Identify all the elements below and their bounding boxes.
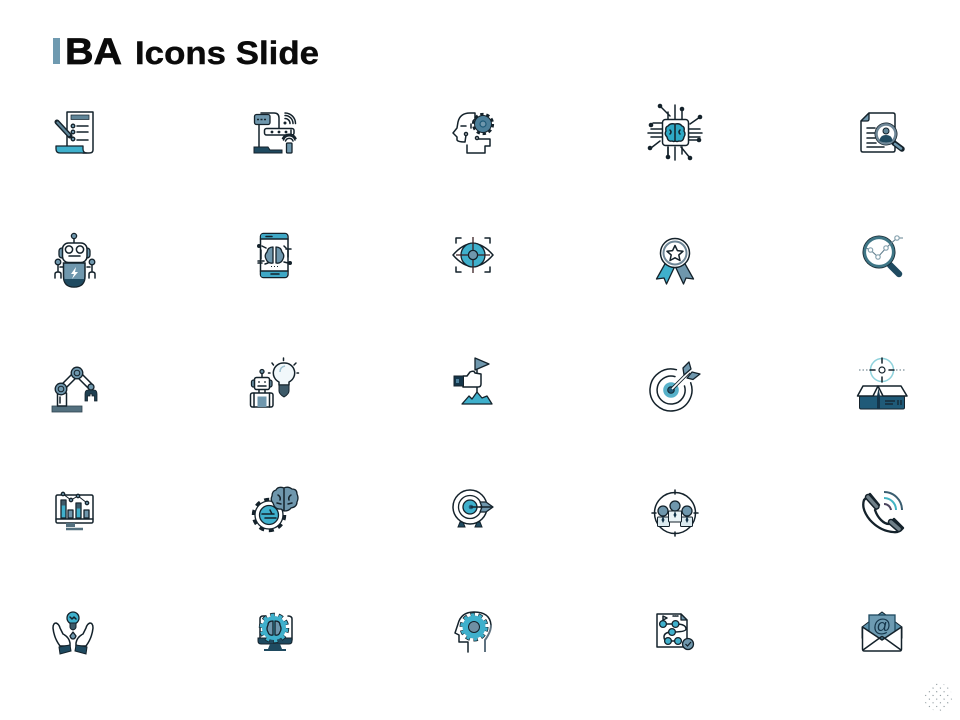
icon: head with gear inside (455, 612, 491, 652)
icon: gear and brain (254, 487, 298, 530)
title (53, 31, 319, 72)
icon: robotic arm (52, 367, 97, 412)
icon: target with arrow (650, 362, 700, 411)
icon: robot (55, 233, 95, 287)
icon: workflow document with check (657, 614, 694, 650)
icon: brain chip (648, 104, 702, 160)
icon: eye with focus target (453, 237, 493, 273)
icon: envelope with at sign (862, 612, 902, 651)
icon: head with gear (453, 113, 492, 153)
icon: box with crosshair (858, 358, 907, 409)
icon: robot and light bulb (250, 358, 298, 407)
icon: team in crosshair (652, 490, 698, 536)
icon: telephone with signal (863, 492, 903, 532)
icon: magnifier with graph (862, 236, 903, 274)
icon: document with magnifier (861, 113, 902, 152)
icon: hands with light bulb (53, 612, 93, 654)
title: BA (65, 31, 122, 72)
icon: monitor with bar chart (56, 492, 93, 529)
icon: award ribbon (656, 238, 694, 284)
title: Icons Slide (135, 35, 319, 71)
icon: envelope with at sign: @ (873, 616, 891, 636)
icon: router and wifi (254, 113, 296, 153)
icon: phone with brain (257, 234, 292, 278)
icon: hand holding flag on mountain (454, 358, 492, 404)
decorative dot circle (924, 683, 952, 711)
icon: monitor with brain gear (258, 615, 292, 651)
icon: document with pen (56, 112, 93, 153)
icon: bullseye target (453, 490, 493, 527)
